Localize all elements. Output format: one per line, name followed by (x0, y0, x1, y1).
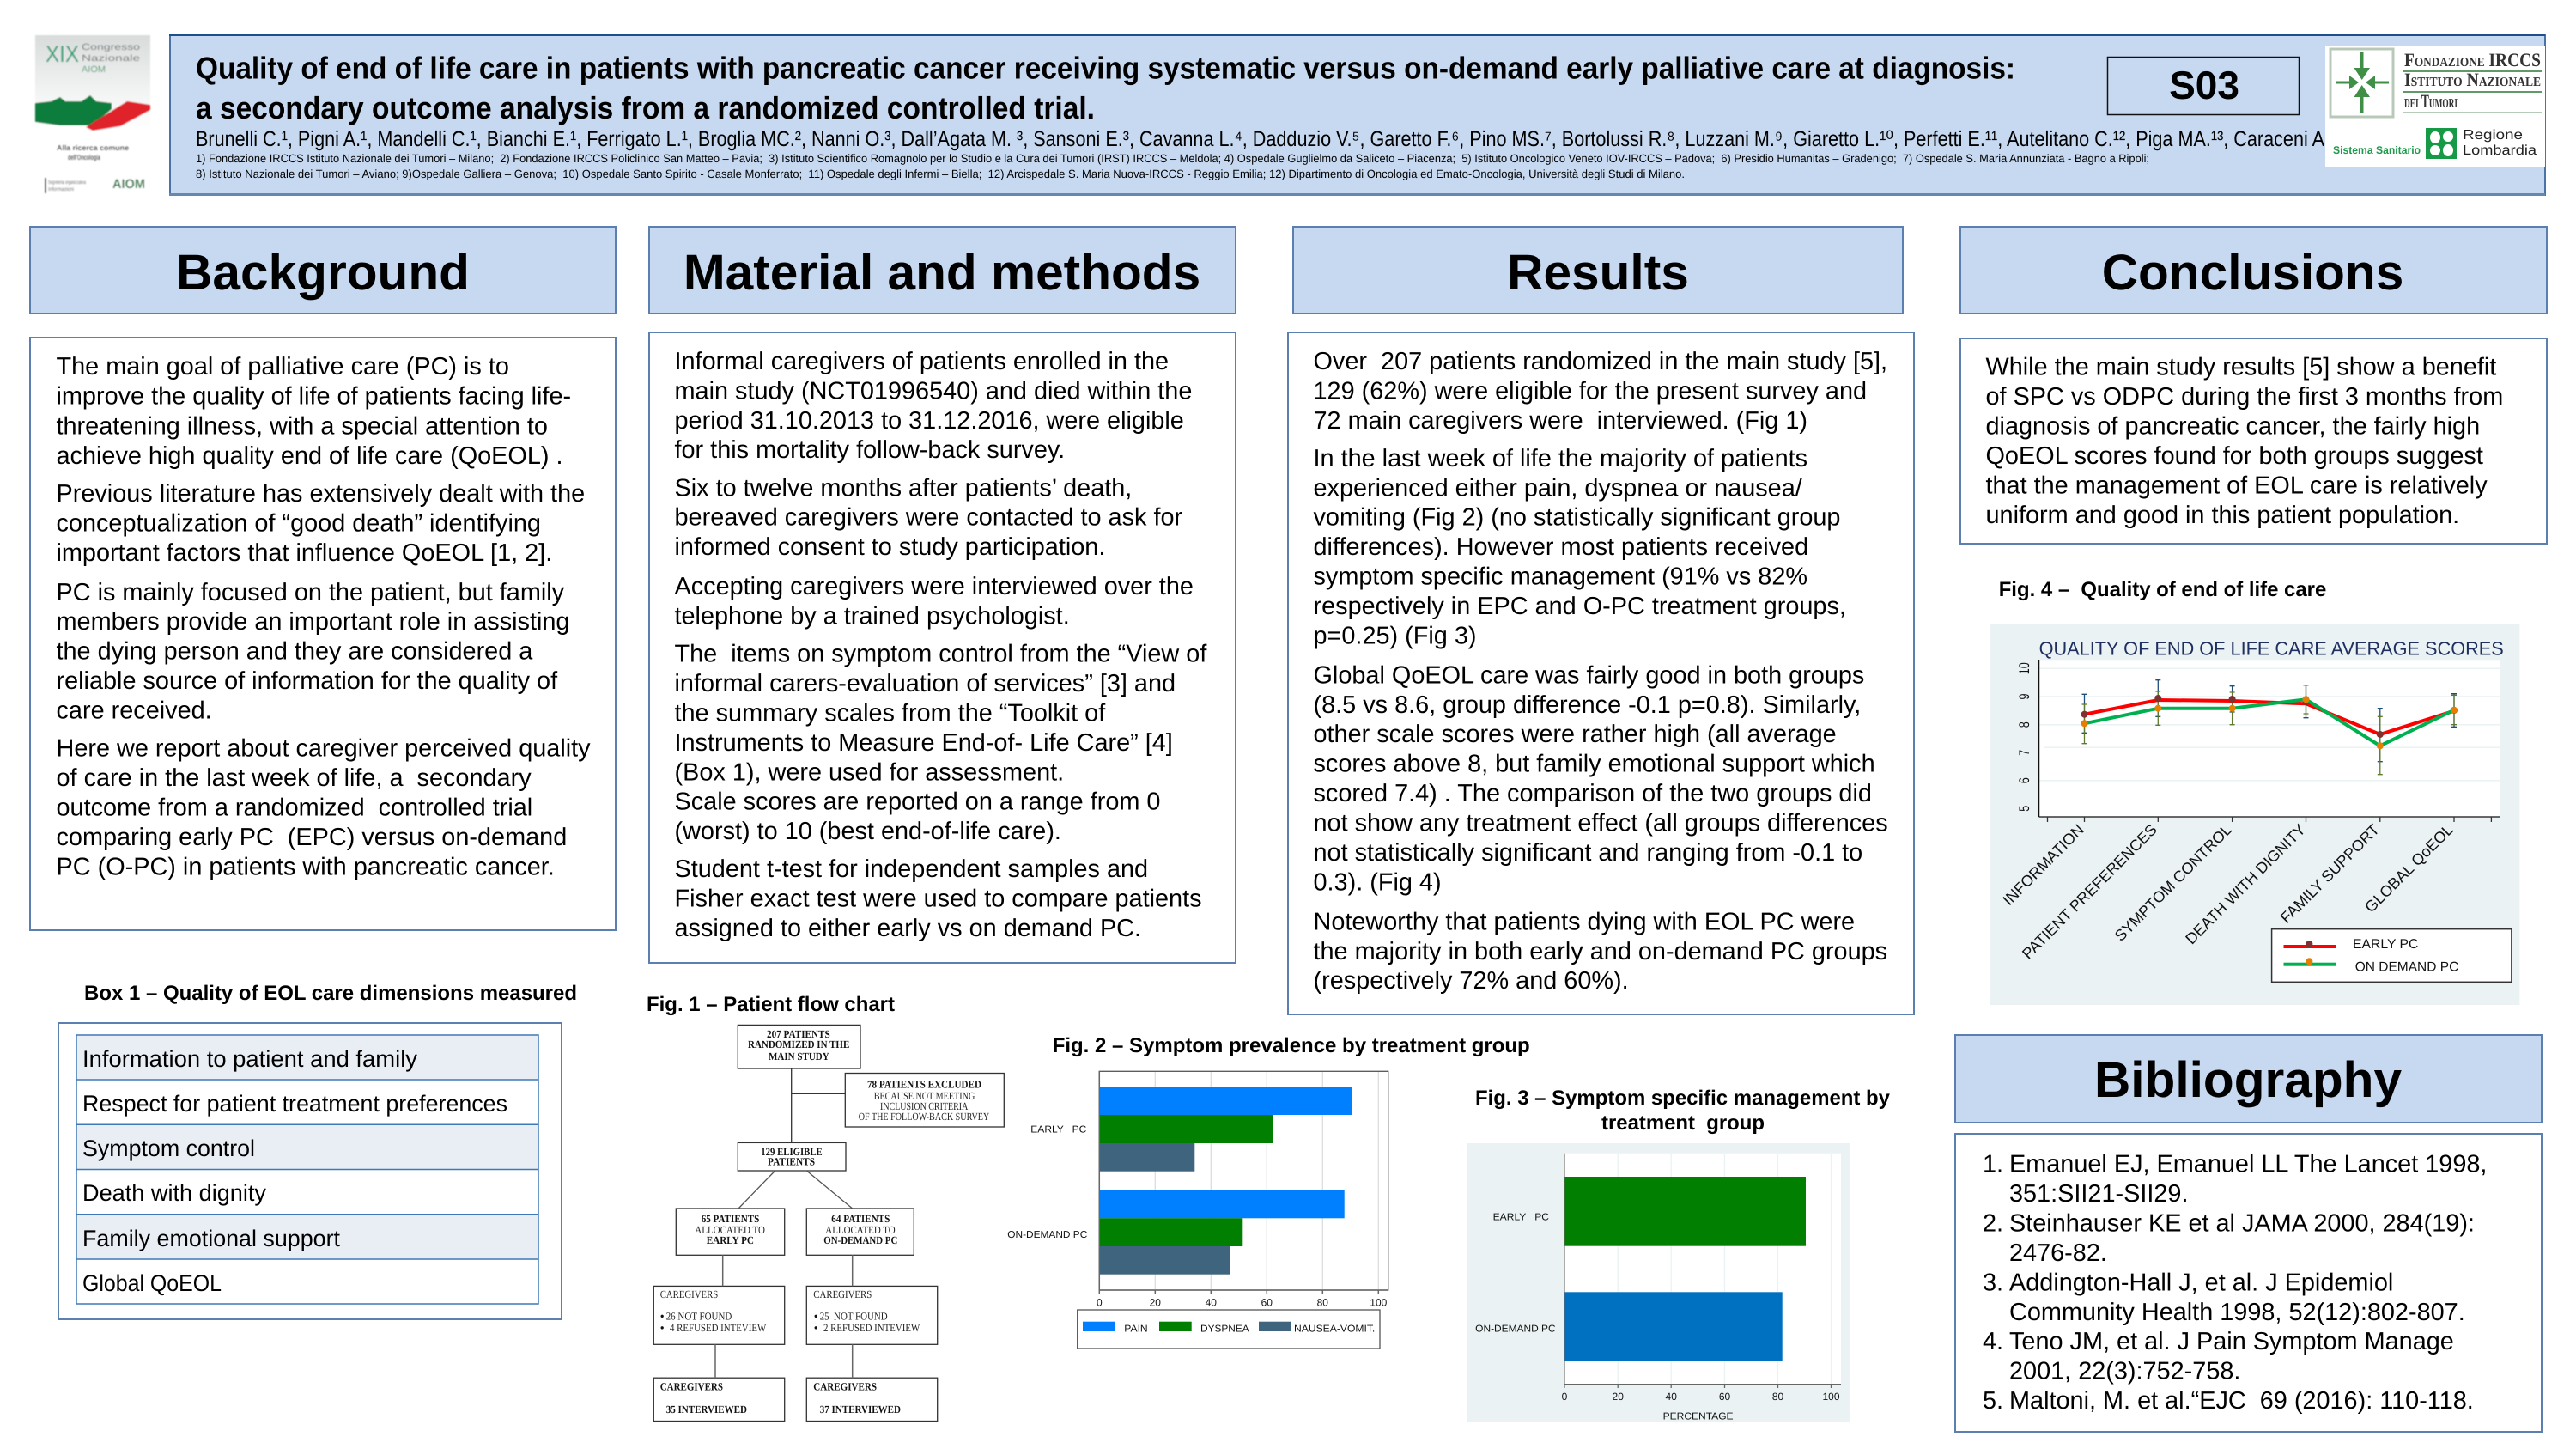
chart: patient flow chart: EARLY PC (707, 1234, 754, 1246)
panel: background text: Previous literature has extensively dealt with the (57, 480, 585, 508)
heading: Background: Background (176, 245, 470, 301)
heading: Material and methods: Material and methods (683, 245, 1200, 301)
chart: patient flow chart: 35 INTERVIEWED (666, 1403, 747, 1416)
panel: background text: The main goal of palliative care (PC) is to (57, 353, 509, 381)
panel: methods text: Student t-test for independent samples and (675, 855, 1148, 883)
panel: results text (0, 0, 1923, 1014)
header banner (169, 34, 2545, 196)
panel: bibliography list: 2476-82. (2009, 1239, 2107, 1267)
chart: quality of end of life care line chart: GLOBAL QoEOL (2361, 821, 2457, 916)
panel: results text: other scale scores were rather high (all average (1314, 721, 1837, 748)
chart: symptom prevalence bars: 0 (1097, 1297, 1103, 1309)
chart: symptom specific management bars (1467, 1143, 1850, 1422)
chart: symptom prevalence bars: 60 (1261, 1297, 1273, 1309)
chart: patient flow chart: CAREGIVERS (660, 1288, 718, 1300)
bars: on-demand PC (1099, 1190, 1345, 1275)
title (196, 50, 2015, 125)
chart: quality of end of life care line chart: 8 (2016, 721, 2032, 728)
chart: patient flow chart: MAIN STUDY (769, 1050, 829, 1062)
chart: patient flow chart (653, 1025, 1004, 1421)
heading: Fig 2: Fig. 2 – Symptom prevalence by treatment group (1053, 1034, 1530, 1057)
bars: early PC (1099, 1087, 1352, 1172)
chart: symptom specific management bars: 0 (1562, 1391, 1568, 1403)
chart: quality of end of life care line chart: 5 (2016, 806, 2032, 812)
panel: results text: Noteworthy that patients dying with EOL PC were (1314, 908, 1855, 935)
chart: quality of end of life care line chart: 6 (2016, 777, 2032, 783)
heading: Fig 3: Fig. 3 – Symptom specific management by (1475, 1087, 1891, 1110)
heading: Conclusions (1960, 227, 2547, 314)
chart: patient flow chart: 2 REFUSED INTEVIEW (823, 1322, 920, 1334)
panel: bibliography list: 4. (1983, 1328, 2003, 1355)
panel: Box 1 dimensions table (58, 1023, 562, 1319)
panel: methods text: main study (NCT01996540) and died within the (675, 377, 1192, 405)
icon: congress logo: Alla ricerca comune (57, 143, 129, 152)
panel: methods text (0, 0, 1241, 963)
legend: NAUSEA-VOMIT. (1294, 1324, 1375, 1335)
panel: Box 1 dimensions table: Family emotional support (82, 1226, 340, 1251)
icon: congress logo: Segreteria organizzativa (48, 180, 86, 186)
chart: patient flow chart: • (660, 1322, 664, 1334)
panel: background text: PC is mainly focused on the patient, but family (57, 579, 565, 606)
line: early PC (2081, 695, 2458, 738)
chart: symptom specific management bars: PERCENTAGE (1663, 1411, 1734, 1422)
panel: results text: (8.5 vs 8.6, group difference -0.1 p=0.8). Similarly, (1314, 691, 1861, 719)
panel: methods text: Informal caregivers of patients enrolled in the (675, 348, 1169, 375)
heading: Fig 1: Fig. 1 – Patient flow chart (647, 993, 895, 1016)
chart title: QUALITY OF END OF LIFE CARE AVERAGE SCORES (2039, 638, 2504, 660)
panel: methods text: period 31.10.2013 to 31.12.2016, were eligible (675, 407, 1184, 435)
panel: results text: Global QoEOL care was fairly good in both groups (1314, 661, 1864, 689)
panel: results text: 129 (62%) were eligible for the present survey and (1314, 377, 1867, 405)
chart: patient flow chart: OF THE FOLLOW-BACK SURVEY (859, 1111, 989, 1123)
panel: background text: the dying person and they are considered a (57, 638, 533, 666)
panel: methods text: Scale scores are reported on a range from 0 (675, 788, 1160, 816)
panel: results text: the majority in both early and on-demand PC groups (1314, 938, 1887, 965)
panel: bibliography list: Teno JM, et al. J Pain Symptom Manage (2009, 1328, 2454, 1355)
chart: quality of end of life care line chart: FAMILY SUPPORT (2277, 821, 2383, 927)
panel: background text: improve the quality of life of patients facing life- (57, 383, 571, 411)
panel: methods text: Six to twelve months after patients’ death, (675, 474, 1132, 502)
icon: institutional logos: Lombardia (2463, 143, 2537, 158)
panel: bibliography list: 1. (1983, 1151, 2003, 1178)
panel: results text: vomiting (Fig 2) (no statistically significant group (1314, 504, 1840, 532)
icon: institutional logos: Istituto Nazionale (2404, 69, 2541, 90)
icon: institutional logos: Sistema Sanitario (2333, 144, 2421, 156)
chart: patient flow chart: 207 PATIENTS (767, 1028, 830, 1040)
chart: symptom specific management bars: ON-DEMAND PC (1475, 1324, 1556, 1334)
heading: Fig 4: Fig. 4 – Quality of end of life care (1999, 578, 2326, 601)
panel: methods text: Accepting caregivers were interviewed over the (675, 573, 1194, 600)
affiliations: 1) Fondazione IRCCS Istituto Nazionale dei Tumori – Milano; 2) Fondazione IRCCS Policlinico San Matteo – Pavia; 3) Istituto Scientifico Romagnolo per lo Studio e la Cura dei Tumori (IRST) IRCCS – Meldola; 4) Ospedale Guglielmo da Saliceto – Piacenza; 5) Istituto Oncologico Veneto IOV-IRCCS – Padova; 6) Presidio Humanitas – Gradenigo; 7) Ospedale S. Maria Annunziata - Bagno a Ripoli; (196, 152, 2149, 165)
chart: patient flow chart: • (814, 1322, 817, 1334)
chart: patient flow chart: INCLUSION CRITERIA (880, 1100, 968, 1112)
chart: patient flow chart: 25 NOT FOUND (820, 1311, 888, 1323)
icon: institutional logos: Regione (2463, 128, 2523, 143)
chart: patient flow chart: CAREGIVERS (660, 1381, 723, 1393)
panel: Box 1 dimensions table: Symptom control (82, 1135, 255, 1161)
panel: bibliography list: 3. (1983, 1269, 2003, 1296)
panel: results text: 0.3). (Fig 4) (1314, 868, 1442, 896)
chart: symptom specific management bars: EARLY PC (1493, 1213, 1549, 1223)
chart: symptom prevalence bars: 80 (1317, 1297, 1328, 1309)
panel: methods text: (Box 1), were used for assessment. (675, 758, 1064, 786)
panel: conclusions text: diagnosis of pancreatic cancer, the fairly high (1985, 412, 2480, 440)
panel: methods text: Fisher exact test were used to compare patients (675, 886, 1202, 913)
chart: patient flow chart: BECAUSE NOT MEETING (874, 1090, 975, 1102)
error bars: on demand PC (2081, 685, 2457, 775)
chart: patient flow chart: 129 ELIGIBLE (761, 1146, 823, 1158)
icon: congress logo: Informazioni (48, 186, 74, 192)
chart: patient flow chart: 78 PATIENTS EXCLUDED (867, 1078, 981, 1090)
panel: results text: experienced either pain, dyspnea or nausea/ (1314, 474, 1803, 502)
axes (2039, 660, 2500, 817)
chart: patient flow chart: PATIENTS (768, 1156, 815, 1168)
chart: quality of end of life care line chart: 10 (2016, 662, 2032, 674)
icon: congress logo: dell'Oncologia (68, 153, 100, 161)
chart: patient flow chart: • (660, 1311, 664, 1323)
panel: Box 1 dimensions table: Global QoEOL (82, 1270, 222, 1296)
panel: bibliography list: Emanuel EJ, Emanuel LL The Lancet 1998, (2009, 1151, 2487, 1178)
chart: quality of end of life care line chart: SYMPTOM CONTROL (2111, 821, 2235, 945)
chart: patient flow chart: ON-DEMAND PC (823, 1234, 897, 1246)
panel: background text: PC (O-PC) in patients with pancreatic cancer. (57, 853, 555, 880)
chart: patient flow chart: 65 PATIENTS (702, 1213, 759, 1225)
icon: congress logo: AIOM (82, 64, 106, 75)
heading: Results: Results (1507, 245, 1689, 301)
panel: background text: reliable source of information for the quality of (57, 667, 558, 695)
chart: symptom prevalence bars: ON-DEMAND PC (1007, 1230, 1087, 1240)
panel: background text: important factors that influence QoEOL [1, 2]. (57, 539, 552, 567)
panel: results text: p=0.25) (Fig 3) (1314, 622, 1476, 649)
panel: conclusions text (0, 0, 2547, 544)
panel: methods text: The items on symptom control from the “View of (675, 641, 1207, 668)
chart: symptom specific management bars: 80 (1772, 1391, 1783, 1403)
chart: quality of end of life care line chart: DEATH WITH DIGNITY (2182, 821, 2309, 947)
chart: symptom prevalence bars: 20 (1150, 1297, 1161, 1309)
heading: Bibliography (1955, 1035, 2542, 1123)
legend (2272, 929, 2512, 982)
poster code box (2107, 57, 2300, 115)
panel: conclusions text: While the main study results [5] show a benefit (1985, 354, 2496, 381)
icon: congress logo: XIX (46, 41, 79, 67)
chart: patient flow chart: RANDOMIZED IN THE (748, 1038, 849, 1050)
heading: Material and methods (649, 227, 1236, 314)
panel: background text: Here we report about caregiver perceived quality (57, 735, 591, 763)
chart: patient flow chart: 26 NOT FOUND (666, 1311, 732, 1323)
chart: symptom prevalence bars (1007, 1071, 1388, 1349)
legend: EARLY PC (2353, 937, 2418, 952)
panel: bibliography list: 2. (1983, 1209, 2003, 1237)
panel: results text: 72 main caregivers were interviewed. (Fig 1) (1314, 407, 1807, 435)
panel: methods text: (worst) to 10 (best end-of-life care). (675, 818, 1061, 845)
legend (1078, 1310, 1380, 1349)
chart: symptom specific management bars: 40 (1666, 1391, 1677, 1403)
panel: methods text: the summary scales from the “Toolkit of (675, 699, 1106, 727)
panel: background text: of care in the last week of life, a secondary (57, 764, 532, 792)
panel: methods text: for this mortality follow-back survey. (675, 436, 1065, 464)
panel: results text: not statistically significant and ranging from -0.1 to (1314, 839, 1862, 867)
chart: symptom prevalence bars: 100 (1370, 1297, 1388, 1309)
chart: patient flow chart: 4 REFUSED INTEVIEW (670, 1322, 766, 1334)
heading: Results (1293, 227, 1903, 314)
panel: methods text: bereaved caregivers were contacted to ask for (675, 504, 1183, 532)
panel: bibliography list: 2001, 22(3):752-758. (2009, 1358, 2240, 1385)
panel: background text: members provide an important role in assisting (57, 608, 569, 636)
panel: Box 1 dimensions table: Information to patient and family (82, 1046, 417, 1072)
icon: congress logo: Congresso (82, 42, 140, 52)
panel: Box 1 dimensions table: Death with dignity (82, 1180, 266, 1206)
icon: congress logo: AIOM (112, 177, 145, 192)
icon: institutional logos: dei Tumori (2404, 90, 2458, 112)
chart: patient flow chart: CAREGIVERS (813, 1288, 872, 1300)
panel: methods text: Instruments to Measure End-of- Life Care” [4] (675, 729, 1173, 757)
chart: quality of end of life care line chart (1990, 624, 2519, 1005)
icon: institutional logos (2325, 46, 2545, 167)
line: on demand PC (2081, 696, 2458, 749)
chart: symptom specific management bars: 20 (1613, 1391, 1624, 1403)
chart: patient flow chart: • (814, 1311, 817, 1323)
panel: results text: differences). However most patients received (1314, 533, 1808, 561)
chart: quality of end of life care line chart: 9 (2016, 693, 2032, 700)
panel: conclusions text: uniform and good in this patient population. (1985, 502, 2459, 529)
chart: quality of end of life care line chart: 7 (2016, 750, 2032, 756)
panel: methods text: informed consent to study participation. (675, 533, 1105, 561)
panel: conclusions text: of SPC vs ODPC during the first 3 months from (1985, 383, 2503, 411)
panel: background text (0, 0, 625, 930)
chart: patient flow chart: CAREGIVERS (813, 1381, 877, 1393)
affiliations: 8) Istituto Nazionale dei Tumori – Aviano; 9)Ospedale Galliera – Genova; 10) Ospedale Santo Spirito - Casale Monferrato; 11) Ospedale degli Infermi – Biella; 12) Arcispedale S. Maria Nuova-IRCCS - Reggio Emilia; 12) Dipartimento di Oncologia ed Emato-Oncologia, Università degli Studi di Milano. (196, 167, 1685, 180)
heading: Background (30, 227, 616, 314)
panel: bibliography list: 351:SII21-SII29. (2009, 1180, 2188, 1208)
poster code box: S03 (2169, 63, 2239, 107)
heading: Conclusions: Conclusions (2102, 245, 2403, 301)
panel: results text: scores above 8, but family emotional support which (1314, 751, 1875, 778)
panel: bibliography list: Steinhauser KE et al JAMA 2000, 284(19): (2009, 1209, 2475, 1237)
affiliations (196, 152, 2149, 180)
chart: symptom prevalence bars: EARLY PC (1030, 1125, 1086, 1135)
chart: patient flow chart: ALLOCATED TO (825, 1224, 896, 1236)
panel: bibliography list: Addington-Hall J, et al. J Epidemiol (2009, 1269, 2393, 1296)
icon: institutional logos: Fondazione IRCCS (2404, 49, 2541, 70)
chart: patient flow chart: 37 INTERVIEWED (820, 1403, 901, 1416)
panel: methods text: informal carers-evaluation of services” [3] and (675, 670, 1176, 697)
chart: symptom prevalence bars: 40 (1206, 1297, 1217, 1309)
icon: congress logo (35, 35, 150, 196)
panel: results text: scored 7.4) . The comparison of the two groups did (1314, 780, 1872, 807)
chart: patient flow chart: ALLOCATED TO (695, 1224, 765, 1236)
legend: ON DEMAND PC (2355, 960, 2458, 975)
panel: background text: achieve high quality end of life care (QoEOL) . (57, 442, 563, 470)
title: a secondary outcome analysis from a randomized controlled trial. (196, 90, 1095, 125)
panel: bibliography list: Community Health 1998, 52(12):802-807. (2009, 1299, 2465, 1326)
chart: quality of end of life care line chart: PATIENT PREFERENCES (2019, 821, 2160, 962)
panel: results text: (respectively 72% and 60%). (1314, 967, 1629, 995)
heading: Box 1: Box 1 – Quality of EOL care dimensions measured (84, 982, 577, 1005)
title: Quality of end of life care in patients with pancreatic cancer receiving systematic versus on-demand early palliative care at diagnosis: (196, 50, 2015, 86)
icon: congress logo: Nazionale (82, 53, 140, 64)
panel: Box 1 dimensions table: Respect for patient treatment preferences (82, 1091, 507, 1117)
panel: results text: In the last week of life the majority of patients (1314, 445, 1807, 472)
panel: bibliography list: Maltoni, M. et al.“EJC 69 (2016): 110-118. (2009, 1387, 2474, 1415)
panel: background text: care received. (57, 697, 212, 725)
panel: methods text: telephone by a trained psychologist. (675, 603, 1070, 630)
error bars: early PC (2081, 680, 2457, 762)
heading: Bibliography: Bibliography (2094, 1052, 2402, 1108)
panel: background text: comparing early PC (EPC) versus on-demand (57, 824, 567, 851)
heading: Fig 3 (1475, 1087, 1891, 1135)
chart: symptom specific management bars: 60 (1719, 1391, 1730, 1403)
chart: patient flow chart: 64 PATIENTS (831, 1213, 890, 1225)
panel: results text: Over 207 patients randomized in the main study [5], (1314, 348, 1887, 375)
panel: background text: outcome from a randomized controlled trial (57, 794, 532, 821)
panel: conclusions text: QoEOL scores found for both groups suggest (1985, 442, 2483, 470)
panel: methods text: assigned to either early vs on demand PC. (675, 915, 1141, 942)
panel: results text: respectively in EPC and O-PC treatment groups, (1314, 593, 1846, 620)
panel: results text: not show any treatment effect (all groups differences (1314, 810, 1888, 837)
legend: DYSPNEA (1200, 1324, 1249, 1335)
chart: symptom specific management bars: 100 (1822, 1391, 1840, 1403)
chart: quality of end of life care line chart: INFORMATION (2000, 821, 2087, 909)
panel: conclusions text: that the management of EOL care is relatively (1985, 472, 2488, 499)
panel: results text: symptom specific management (91% vs 82% (1314, 563, 1807, 591)
panel: bibliography list: 5. (1983, 1387, 2003, 1415)
panel: background text: conceptualization of “good death” identifying (57, 509, 541, 537)
panel: background text: threatening illness, with a special attention to (57, 412, 548, 440)
heading: Fig 3: treatment group (1601, 1111, 1765, 1135)
legend: PAIN (1124, 1324, 1148, 1335)
